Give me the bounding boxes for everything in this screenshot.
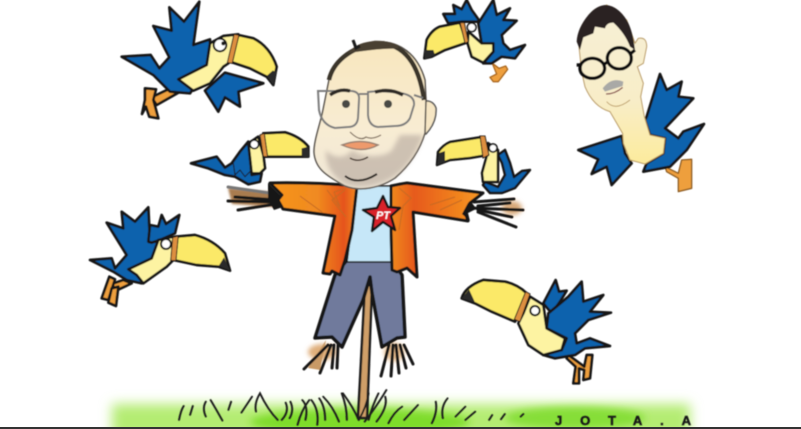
signature: JOTA.A — [555, 413, 692, 428]
PT star badge: PT — [376, 210, 391, 222]
jacket right side — [391, 183, 483, 277]
glasses — [577, 48, 635, 78]
beard — [326, 135, 423, 187]
PT star badge — [363, 196, 400, 231]
toucan: on right arm — [437, 136, 530, 193]
left cuff ink — [268, 183, 283, 210]
grass blades — [179, 390, 523, 425]
toucan: on left arm — [191, 132, 309, 184]
grass ground patch — [112, 404, 690, 429]
left wing — [578, 136, 632, 185]
straw at pant legs — [304, 340, 413, 376]
shirt — [347, 186, 392, 262]
bird legs — [665, 159, 692, 192]
hair — [329, 40, 424, 100]
eyes and brows — [330, 90, 403, 108]
hair — [577, 5, 635, 50]
straw at left sleeve — [228, 187, 278, 210]
glasses — [318, 91, 423, 128]
right cuff ink — [462, 193, 485, 221]
bird with caricature head, top right — [577, 5, 704, 192]
trousers — [315, 260, 405, 347]
toucan: bottom right — [462, 280, 611, 383]
moustache and mouth — [603, 80, 623, 94]
right wing and tail — [643, 74, 704, 172]
nose — [350, 132, 381, 139]
ear — [420, 101, 436, 134]
wooden stake — [358, 285, 372, 418]
artwork — [90, 0, 704, 428]
head — [314, 42, 426, 189]
jacket left side — [270, 183, 357, 275]
lapels — [300, 188, 462, 230]
bottom border line — [0, 427, 801, 429]
mouth and moustache — [342, 142, 378, 181]
toucan: top centre — [424, 0, 525, 82]
scarecrow — [228, 40, 523, 418]
straw at right sleeve — [470, 199, 523, 227]
toucan: bottom left — [90, 207, 230, 306]
toucan: top left — [122, 2, 277, 118]
head, neck and belly — [578, 5, 665, 164]
jaw lines — [607, 100, 630, 106]
